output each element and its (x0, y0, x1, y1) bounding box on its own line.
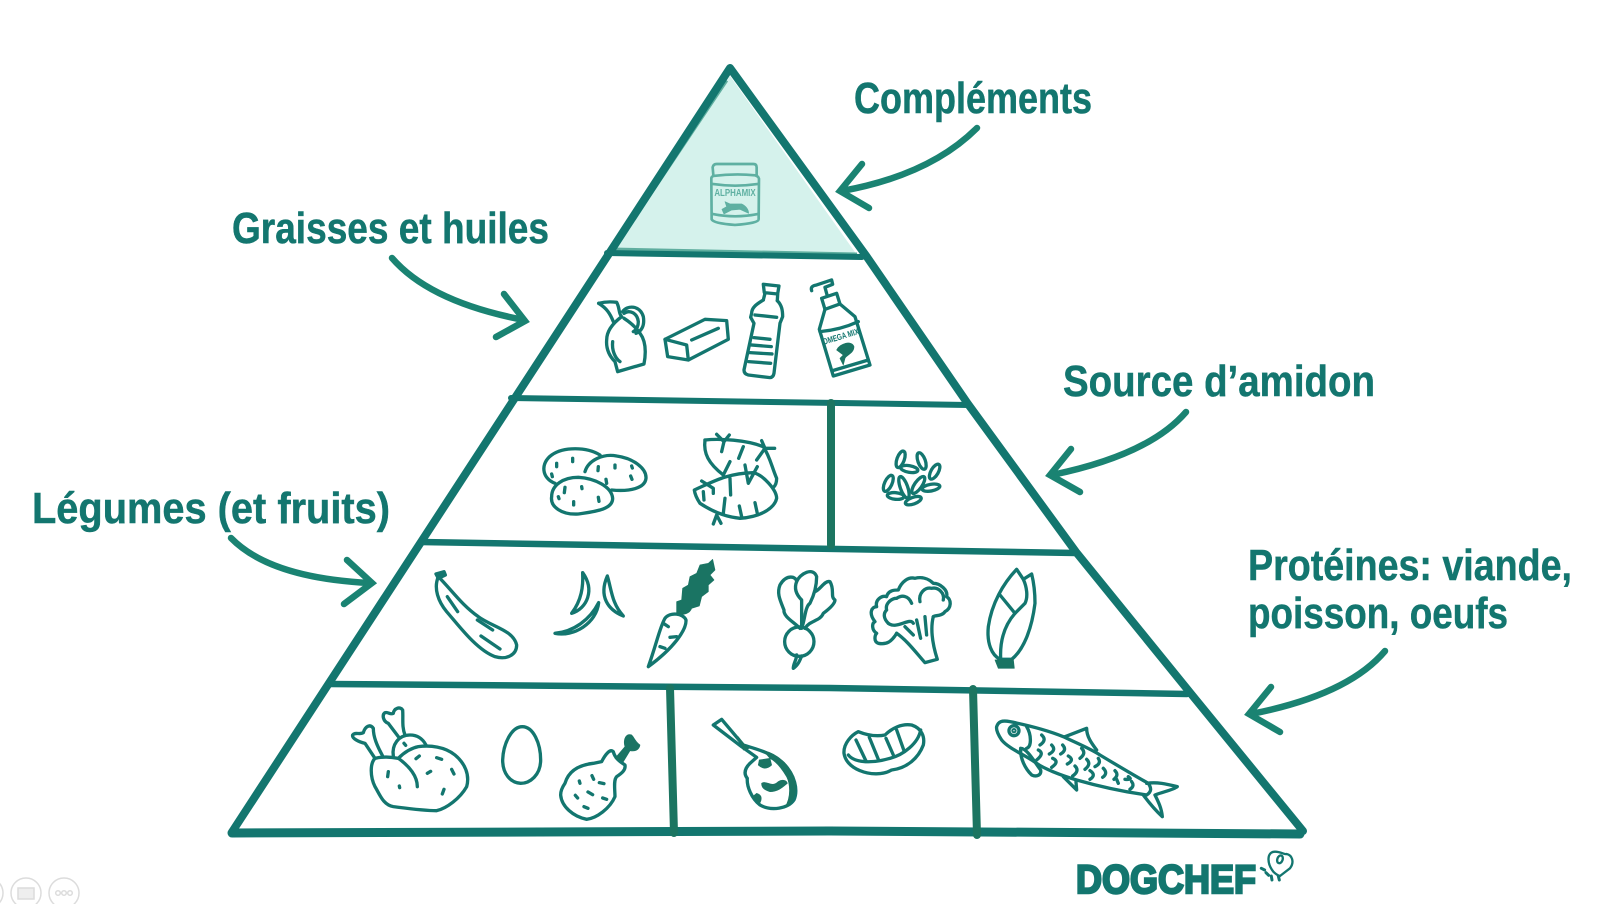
icon: sardine (997, 721, 1177, 817)
icon: potatoes (544, 449, 646, 514)
tier dividers (670, 403, 977, 835)
icon: endive (988, 569, 1035, 668)
icon: drumstick (561, 735, 640, 819)
arrow: Légumes (231, 538, 372, 604)
panel: pyramid structure (232, 68, 1303, 835)
icon: egg (503, 727, 541, 783)
arrows (231, 128, 1385, 732)
icon: Omega Mix pump bottle (811, 280, 870, 376)
label: Protéines: poisson, oeufs (1248, 589, 1508, 638)
icon: Alphamix jar: ALPHAMIX (714, 188, 756, 199)
label: Source d'amidon: Source d’amidon (1063, 357, 1375, 406)
top tier fill: compléments (612, 76, 857, 255)
icons: protein tier right (844, 721, 1177, 817)
icon: rice grains (881, 450, 942, 507)
icon: sweet potatoes (694, 434, 777, 524)
icon: butter (665, 319, 728, 360)
arrow: Protéines (1249, 651, 1385, 732)
icons: tiers 3 and 4 (544, 434, 950, 668)
icon: steak (844, 725, 924, 774)
icon: logo heart mark (1261, 852, 1292, 880)
icon: Omega Mix pump bottle: OMEGA MIX (821, 326, 860, 347)
icon: broccoli (871, 578, 950, 663)
arrow: Compléments (840, 128, 977, 208)
labels (32, 74, 1572, 638)
icon: leg of lamb (713, 719, 796, 809)
pyramid outline and tier lines (232, 68, 1303, 834)
icon: green beans (555, 573, 623, 634)
icon: carrot (648, 559, 715, 667)
icon: whole chicken (353, 708, 468, 811)
viewer toolbar buttons (0, 878, 79, 904)
label: Légumes (et fruits): Légumes (et fruits) (32, 484, 390, 533)
logo: DogChef: DOGCHEF (1076, 858, 1256, 902)
icon: zucchini (436, 572, 517, 658)
arrow: Graisses et huiles (392, 258, 525, 337)
icon: oil jug (599, 302, 645, 372)
arrow: Source d'amidon (1050, 412, 1186, 492)
icon: radish (779, 572, 835, 668)
icons: tier 1 and 2 (599, 164, 870, 378)
icons: protein tier left (353, 708, 796, 819)
label: Graisses et huiles: Graisses et huiles (232, 204, 549, 253)
label: Compléments: Compléments (854, 74, 1092, 123)
icon: Alphamix jar (711, 164, 759, 225)
icon: oil bottle (744, 284, 783, 378)
label: Protéines (1248, 541, 1572, 638)
